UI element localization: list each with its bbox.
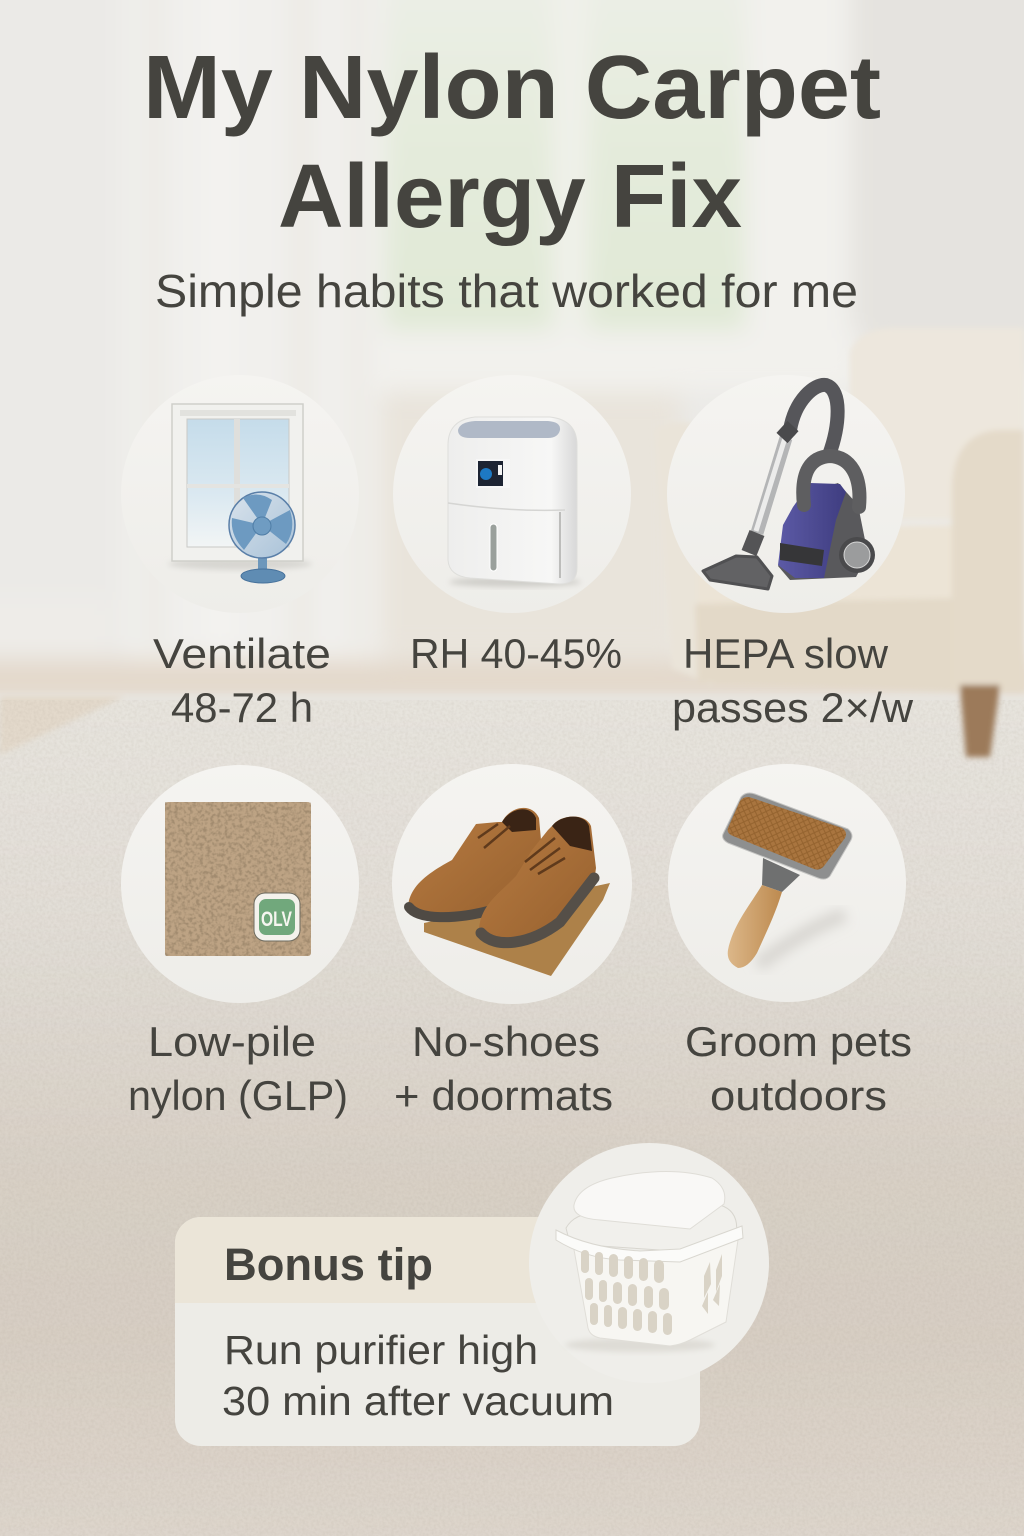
label: no-shoes: + doormats	[394, 1072, 613, 1119]
icon: window	[168, 404, 312, 570]
label: no-shoes	[394, 1018, 613, 1119]
label: groom: outdoors	[710, 1072, 887, 1119]
label: groom	[685, 1018, 912, 1119]
icon: vacuum cleaner	[703, 385, 875, 589]
panel: ventilate	[121, 375, 359, 613]
icon: GLP badge	[254, 893, 300, 941]
tip text: 30 min after vacuum	[222, 1378, 614, 1424]
label: low-pile	[128, 1018, 348, 1119]
panel: pet grooming	[668, 764, 906, 1002]
icon: towels in basket	[556, 1172, 743, 1352]
label: rh: RH 40-45%	[410, 630, 622, 677]
panel: dehumidifier	[393, 375, 631, 613]
icon: brown shoes	[408, 808, 596, 943]
subtitle: Simple habits that worked for me	[155, 265, 858, 317]
label: ventilate	[153, 630, 331, 731]
tip text	[222, 1327, 614, 1424]
panel: shoes and doormat	[392, 764, 632, 1004]
bonus header band	[175, 1217, 538, 1303]
icon: doormat	[424, 883, 610, 976]
tip text: Run purifier high	[224, 1327, 538, 1373]
label: groom: Groom pets	[685, 1018, 912, 1065]
label: hepa: HEPA slow	[683, 630, 889, 677]
label: ventilate: 48-72 h	[171, 684, 313, 731]
title: Allergy Fix	[278, 147, 742, 247]
label: low-pile: nylon (GLP)	[128, 1072, 348, 1119]
icon: GLP badge: OLV	[261, 908, 292, 931]
label: hepa: passes 2×/w	[672, 684, 914, 731]
armchair in background	[655, 328, 1024, 757]
panel: vacuum	[667, 375, 905, 613]
icon: desk fan	[229, 492, 295, 583]
panel: low-pile carpet	[121, 765, 359, 1003]
title	[143, 38, 881, 247]
label: no-shoes: No-shoes	[412, 1018, 600, 1065]
heading: bonus tip: Bonus tip	[224, 1239, 433, 1290]
icon: carpet swatch	[165, 802, 311, 956]
panel: bonus tip card	[175, 1217, 700, 1446]
label: low-pile: Low-pile	[148, 1018, 316, 1065]
label: ventilate: Ventilate	[153, 630, 331, 677]
label: hepa	[672, 630, 914, 731]
icon: dehumidifier	[448, 417, 581, 587]
panel: laundry basket	[529, 1143, 769, 1383]
icon: slicker brush	[723, 793, 852, 968]
title: My Nylon Carpet	[143, 38, 881, 138]
